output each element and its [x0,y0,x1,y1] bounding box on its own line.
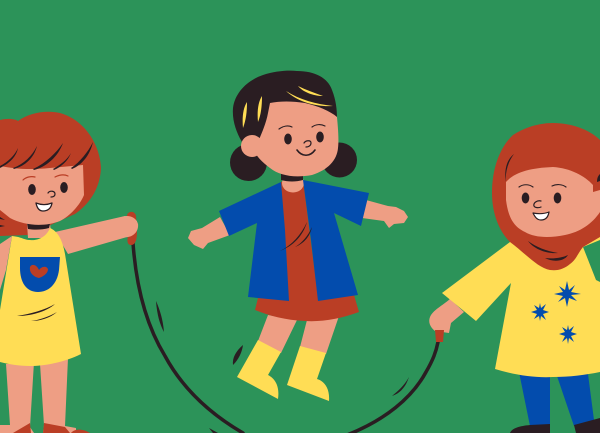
middle child smile [297,150,315,155]
right child hijab [492,123,600,270]
middle child boots [237,340,329,401]
middle child hair buns [230,142,357,181]
middle child legs [258,315,339,354]
left child fringe strokes [0,142,93,170]
middle child neck [282,174,304,192]
left child mouth [36,203,52,211]
left child eyebrows [23,175,68,180]
left child sandals [13,423,90,433]
right child shirt stars [531,281,581,344]
middle child dress creases [280,222,312,251]
middle child left arm [188,217,230,249]
middle child hair highlights [243,86,333,128]
right child shoes [510,418,600,433]
left child face [0,165,84,225]
left child hand [116,216,138,237]
right child hijab folds [505,154,600,261]
left child eyes [28,182,68,195]
left child hair [0,112,101,236]
right child eyebrows [519,185,566,187]
middle child jacket right [303,180,369,301]
middle child ear [241,135,263,157]
left child pocket [20,257,60,292]
left child rope handle [127,212,137,245]
left child dress [0,228,81,366]
jump rope [133,243,438,433]
middle child hair [233,71,337,145]
right child eyes [522,192,561,204]
left child nose [48,191,55,197]
right child pants [519,372,594,426]
left child dress creases [17,304,57,321]
left child [0,112,138,433]
left child neck [27,224,52,238]
middle child [188,71,408,401]
middle child eyebrows [279,125,325,129]
left child hair strands at neck [0,217,5,227]
right child nose [534,201,541,208]
left child heart on pocket [30,265,48,278]
left child legs [0,358,76,433]
middle child face [254,102,338,176]
right child shirt [442,230,600,377]
right child [429,123,600,433]
middle child skirt and dress [255,180,359,321]
left child outer arm [55,216,137,254]
left child inner arm [0,236,12,290]
right child hand [429,299,464,333]
motion marks around rope [156,301,409,433]
right child mouth [533,212,549,220]
right child face [506,167,600,237]
middle child nose [304,141,311,147]
middle child right arm [362,200,408,228]
right child rope handle [435,330,444,342]
left child choker [27,223,50,230]
middle child jacket left [219,182,289,301]
middle child choker [281,174,303,182]
middle child eyes [284,132,324,144]
